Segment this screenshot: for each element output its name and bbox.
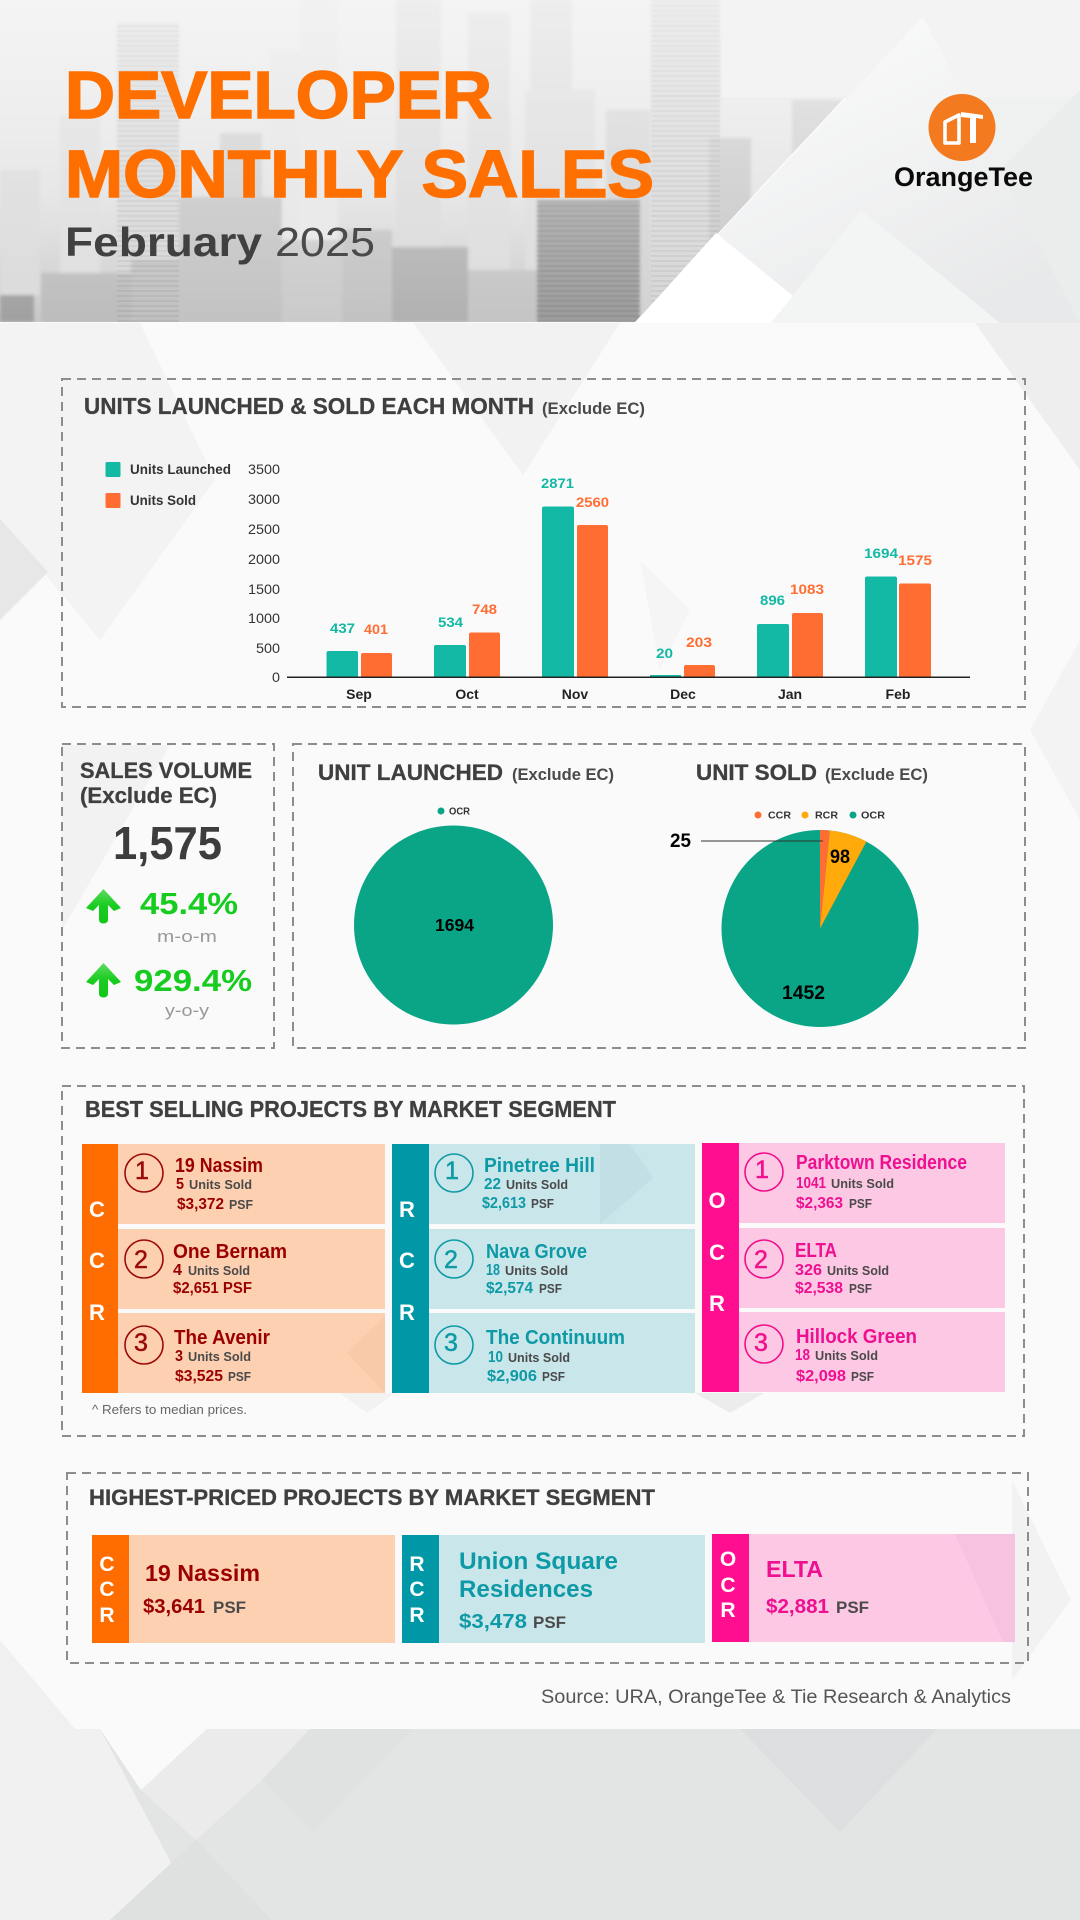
OCR rank 1: 1 <box>755 1156 769 1184</box>
RCR rank 3: PSF <box>542 1370 565 1384</box>
CCR rank 1: PSF <box>229 1198 253 1212</box>
bar chart: monthly units: Jan <box>778 686 802 702</box>
RCR highest-priced card: C <box>409 1578 425 1601</box>
OCR rank 3: PSF <box>851 1370 874 1384</box>
CCR highest-priced card: R <box>99 1604 115 1627</box>
title <box>65 58 654 212</box>
chart legend <box>106 461 231 508</box>
CCR rank 2: 2 <box>134 1246 148 1274</box>
RCR rank 1: Units Sold <box>506 1178 568 1192</box>
OCR highest-priced card: O <box>720 1548 736 1571</box>
icon: up arrow year on year <box>86 963 121 998</box>
bar chart: monthly units: 2500 <box>248 521 280 537</box>
title: MONTHLY SALES <box>65 137 654 212</box>
OCR rank 3: $2,098 <box>796 1368 846 1385</box>
RCR rank 2 <box>435 1240 587 1297</box>
pie chart: units sold <box>670 830 918 1027</box>
CCR rank 2 <box>125 1240 287 1297</box>
CCR rank 1: 19 Nassim <box>175 1155 263 1177</box>
CCR highest-priced card <box>92 1535 395 1643</box>
bar chart: monthly units: 1083 <box>790 581 824 597</box>
OCR column <box>702 1143 1005 1392</box>
pie chart: units launched <box>354 826 553 1024</box>
bar chart: monthly units: 2871 <box>541 475 574 491</box>
legend: unit launched pie <box>438 806 470 818</box>
RCR rank 1: $2,613 <box>482 1195 526 1212</box>
CCR rank 3: The Avenir <box>174 1327 270 1349</box>
OCR rank 1: Parktown Residence <box>796 1152 967 1174</box>
OCR rank 3 <box>745 1325 917 1385</box>
panel: best selling projects <box>62 1086 1024 1436</box>
heading: best selling: BEST SELLING PROJECTS BY MARKET SEGMENT <box>85 1096 616 1122</box>
RCR column <box>392 1144 695 1393</box>
RCR column: R <box>399 1300 415 1325</box>
RCR rank 2: 2 <box>444 1246 458 1274</box>
OCR highest-priced card: ELTA <box>766 1556 823 1582</box>
legend: unit sold pie <box>754 810 885 822</box>
RCR rank 2: Units Sold <box>505 1264 568 1278</box>
OCR highest-priced card: $2,881 <box>766 1596 829 1618</box>
OCR rank 2: PSF <box>849 1282 872 1296</box>
OCR rank 1: 1041 <box>796 1175 826 1192</box>
pie chart: units launched: 1694 <box>435 915 474 935</box>
CCR rank 2: $2,651 PSF <box>173 1280 252 1297</box>
pie chart: units sold: 25 <box>670 831 691 852</box>
CCR highest-priced card: 19 Nassim <box>145 1560 260 1586</box>
RCR rank 1: PSF <box>531 1197 554 1211</box>
heading: sales volume: SALES VOLUME <box>80 758 252 783</box>
CCR rank 1 <box>125 1154 263 1213</box>
year on year change: 929.4% <box>134 963 252 998</box>
header right triangles <box>635 0 1080 323</box>
panel: units launched and sold each month <box>62 379 1025 707</box>
bar chart: monthly units: Oct <box>455 686 479 702</box>
RCR column: C <box>399 1248 415 1273</box>
legend: unit sold pie: CCR <box>768 810 791 822</box>
OCR rank 3: Hillock Green <box>796 1326 917 1348</box>
bar chart: monthly units: 748 <box>472 601 497 617</box>
bar chart: monthly units: 3000 <box>248 491 280 507</box>
OCR highest-priced card: PSF <box>836 1598 869 1617</box>
bar chart: monthly units: Feb <box>886 686 910 702</box>
chart legend: Units Launched <box>130 461 231 477</box>
bar chart: monthly units: 0 <box>272 669 280 685</box>
RCR rank 3: 3 <box>444 1329 458 1357</box>
RCR rank 2: 18 <box>486 1262 500 1279</box>
RCR rank 2: Nava Grove <box>486 1241 587 1263</box>
CCR column: C <box>89 1197 105 1222</box>
CCR column: R <box>89 1300 105 1325</box>
RCR rank 1: 22 <box>484 1176 501 1193</box>
title: DEVELOPER <box>65 58 492 133</box>
CCR highest-priced card: C <box>99 1553 115 1576</box>
month on month change: m-o-m <box>157 927 217 946</box>
bar chart: monthly units: 20 <box>656 645 673 661</box>
heading: units launched and sold: UNITS LAUNCHED & SOLD EACH MONTH <box>84 393 534 419</box>
subtitle: February 2025: February <box>65 219 262 265</box>
CCR highest-priced card: C <box>99 1578 115 1601</box>
OCR rank 2: $2,538 <box>795 1280 843 1297</box>
OCR rank 3: 3 <box>754 1329 768 1357</box>
CCR rank 2: One Bernam <box>173 1241 287 1263</box>
heading: unit sold: UNIT SOLD <box>696 760 817 785</box>
CCR column: C <box>89 1248 105 1273</box>
CCR column <box>82 1144 385 1393</box>
OCR rank 1: Units Sold <box>831 1177 894 1191</box>
bar chart: monthly units: 401 <box>364 621 388 637</box>
RCR rank 1: Pinetree Hill <box>484 1155 595 1177</box>
OCR rank 1 <box>745 1152 967 1212</box>
RCR rank 2: $2,574 <box>486 1280 533 1297</box>
bar chart: monthly units: 534 <box>438 614 463 630</box>
bar chart: monthly units: 1500 <box>248 581 280 597</box>
panel: highest-priced projects <box>67 1473 1028 1663</box>
month on month change <box>140 886 238 946</box>
OCR rank 2: 2 <box>754 1246 768 1274</box>
RCR highest-priced card: Residences <box>459 1576 593 1603</box>
RCR highest-priced card <box>402 1535 705 1643</box>
bar chart: monthly units <box>248 461 970 702</box>
sales volume figure: 1,575 <box>113 817 222 869</box>
RCR highest-priced card: $3,478 <box>459 1611 527 1633</box>
OCR rank 2: 326 <box>795 1262 822 1279</box>
OCR column: R <box>709 1291 725 1316</box>
CCR rank 2: 4 <box>173 1262 182 1279</box>
CCR rank 1: 1 <box>135 1157 149 1185</box>
logo: OrangeTee <box>894 94 1033 192</box>
heading: unit sold <box>696 760 928 785</box>
bar chart: monthly units: 896 <box>760 592 785 608</box>
CCR highest-priced card: $3,641 <box>143 1596 205 1618</box>
footnote: ^ Refers to median prices. <box>92 1403 247 1417</box>
RCR rank 3 <box>435 1326 625 1385</box>
OCR column: O <box>708 1188 726 1213</box>
RCR rank 3: 10 <box>488 1349 503 1366</box>
bar chart: monthly units: 2000 <box>248 551 280 567</box>
RCR rank 3: The Continuum <box>486 1327 625 1349</box>
header skyline image <box>0 0 844 322</box>
OCR highest-priced card: R <box>720 1599 736 1622</box>
heading: unit launched: UNIT LAUNCHED <box>318 760 503 785</box>
heading: unit launched: (Exclude EC) <box>512 765 614 784</box>
year on year change <box>134 963 252 1020</box>
OCR rank 3: Units Sold <box>815 1349 878 1363</box>
OCR rank 2: ELTA <box>795 1240 837 1262</box>
heading: unit launched <box>318 760 614 785</box>
bar chart: monthly units: Nov <box>562 686 588 702</box>
RCR rank 3: Units Sold <box>508 1351 570 1365</box>
RCR rank 3: $2,906 <box>487 1368 537 1385</box>
CCR rank 3: $3,525 <box>175 1368 223 1385</box>
CCR rank 1: $3,372 <box>177 1196 224 1213</box>
subtitle: February 2025 <box>65 219 375 265</box>
CCR rank 1: Units Sold <box>189 1178 252 1192</box>
OCR highest-priced card <box>712 1534 1015 1642</box>
CCR rank 3: 3 <box>175 1348 183 1365</box>
bottom band background <box>0 1729 1080 1920</box>
RCR highest-priced card: R <box>409 1553 425 1576</box>
pie chart: units sold: 98 <box>830 847 850 868</box>
RCR highest-priced card: PSF <box>533 1613 566 1632</box>
logo: OrangeTee: OrangeTee <box>894 162 1033 192</box>
CCR highest-priced card: PSF <box>213 1598 246 1617</box>
RCR rank 2: PSF <box>539 1282 562 1296</box>
panel: sales volume <box>62 744 274 1048</box>
heading: highest-priced: HIGHEST-PRICED PROJECTS BY MARKET SEGMENT <box>89 1485 656 1510</box>
CCR rank 1: 5 <box>176 1176 184 1193</box>
heading: sales volume <box>80 758 252 808</box>
CCR rank 3: 3 <box>134 1329 148 1357</box>
bar chart: monthly units: 3500 <box>248 461 280 477</box>
RCR highest-priced card: Union Square <box>459 1548 618 1575</box>
CCR rank 2: Units Sold <box>188 1264 250 1278</box>
panel: unit launched and unit sold pies <box>293 744 1025 1048</box>
icon: up arrow month on month <box>86 889 121 924</box>
pie chart: units sold: 1452 <box>782 983 825 1004</box>
OCR rank 3: 18 <box>795 1347 810 1364</box>
OCR rank 2: Units Sold <box>827 1264 889 1278</box>
CCR rank 3: PSF <box>228 1370 251 1384</box>
CCR rank 3: Units Sold <box>188 1350 251 1364</box>
OCR highest-priced card: C <box>720 1574 736 1597</box>
OCR rank 1: PSF <box>849 1197 872 1211</box>
OCR rank 2 <box>745 1240 889 1297</box>
OCR column: C <box>709 1240 725 1265</box>
subtitle: February 2025: 2025 <box>275 219 375 265</box>
RCR highest-priced card: R <box>409 1604 425 1627</box>
RCR rank 1 <box>435 1154 595 1212</box>
bar chart: monthly units: 437 <box>330 620 355 636</box>
heading: unit sold: (Exclude EC) <box>825 765 928 784</box>
chart legend: Units Sold <box>130 492 196 508</box>
CCR rank 3 <box>125 1326 270 1385</box>
legend: unit sold pie: RCR <box>815 810 838 822</box>
source note: Source: URA, OrangeTee & Tie Research & Analytics <box>541 1687 1011 1708</box>
bar chart: monthly units: 203 <box>686 634 712 650</box>
legend: unit launched pie: OCR <box>449 806 470 818</box>
RCR rank 1: 1 <box>445 1157 459 1185</box>
RCR column: R <box>399 1197 415 1222</box>
OCR rank 1: $2,363 <box>796 1195 843 1212</box>
heading: units launched and sold: (Exclude EC) <box>542 399 645 418</box>
bar chart: monthly units: 1694 <box>864 545 898 561</box>
bar chart: monthly units: 500 <box>256 640 280 656</box>
heading: sales volume: (Exclude EC) <box>80 783 217 808</box>
year on year change: y-o-y <box>165 1001 210 1020</box>
bar chart: monthly units: Sep <box>346 686 372 702</box>
bar chart: monthly units: Dec <box>670 686 696 702</box>
bar chart: monthly units: 1000 <box>248 610 280 626</box>
month on month change: 45.4% <box>140 886 238 921</box>
bar chart: monthly units: 1575 <box>898 552 932 568</box>
legend: unit sold pie: OCR <box>861 810 885 822</box>
bar chart: monthly units: 2560 <box>576 494 609 510</box>
